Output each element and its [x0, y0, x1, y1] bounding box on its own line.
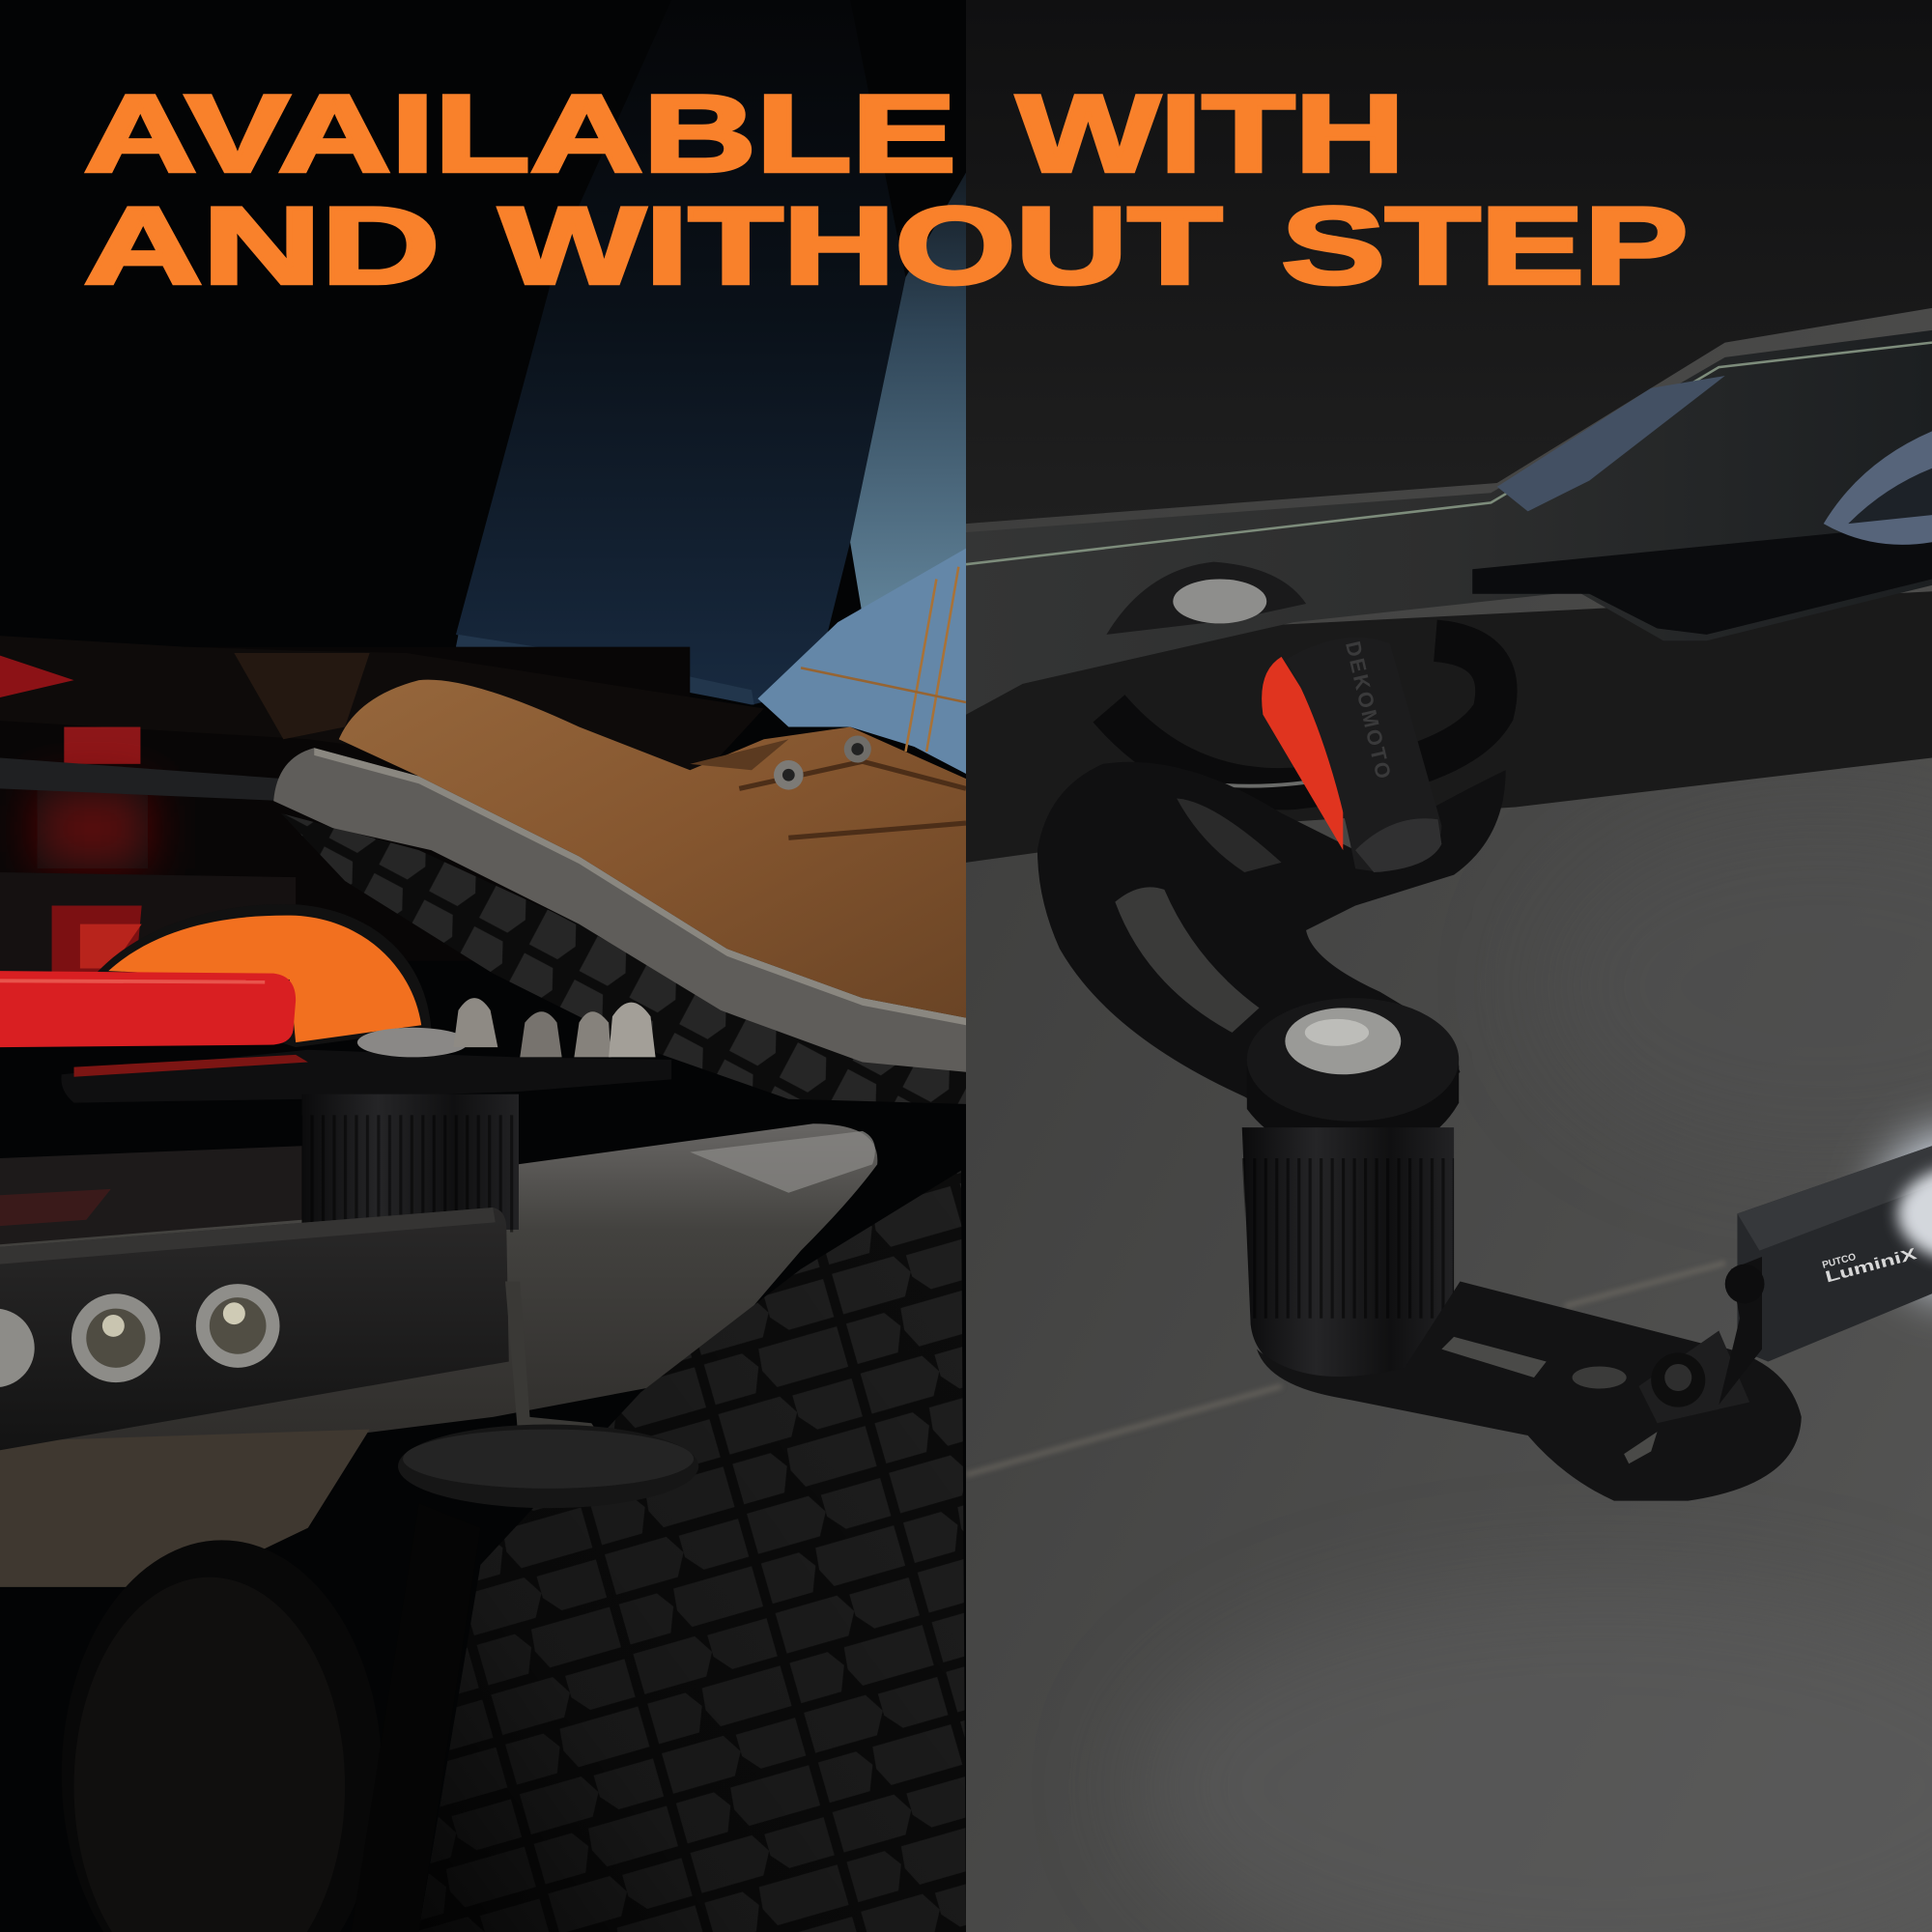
- glowing light: [1879, 1133, 1932, 1293]
- step plate with studs: [61, 998, 671, 1103]
- tire: [425, 1171, 966, 1932]
- boot leather upper: [339, 680, 966, 1018]
- ribbed cylinder: [301, 1094, 519, 1233]
- brand text: LuminiX: [1823, 1244, 1918, 1287]
- silver bumper: [0, 1123, 877, 1587]
- title: [84, 72, 1688, 307]
- bracket upper arm: [1037, 762, 1506, 1155]
- dark truck rack with red reflections: [0, 636, 764, 985]
- panel: right photo, without step: [966, 0, 1932, 1932]
- title: STEP: [1282, 185, 1688, 307]
- boot sole and tread: [273, 748, 966, 1104]
- jeans, light denim and cuff: [757, 173, 966, 774]
- light bar with LEDs: [0, 1208, 509, 1450]
- ribbed cylinder: [1242, 1127, 1454, 1382]
- bracket lower arm: [1257, 1282, 1802, 1501]
- title: WITH: [1016, 72, 1405, 195]
- chrome bumper strip: [966, 330, 1932, 715]
- strap with red loop: [1262, 638, 1441, 872]
- concrete floor lighting: [966, 813, 1932, 1932]
- wheel shadow: [73, 1540, 345, 1932]
- red hook bar: [0, 971, 296, 1047]
- upper mount bolt: [1106, 562, 1306, 635]
- lower mount disc: [398, 1282, 698, 1508]
- brand text: PUTCO: [1821, 1252, 1858, 1271]
- title: WITHOUT: [499, 185, 1222, 307]
- panel: left photo, step in use: [0, 0, 966, 1932]
- brand text: [1821, 1236, 1918, 1287]
- title: AND: [84, 185, 440, 307]
- orange half disc: [96, 904, 431, 1047]
- LED light pod with branding: [1719, 1146, 1932, 1405]
- jeans, dark leg: [456, 95, 906, 705]
- strap with red loop: DEKOMOTO: [1341, 639, 1397, 783]
- black bumper upper: [966, 0, 1932, 524]
- title: AVAILABLE: [84, 72, 956, 195]
- shadow area under bumper: [966, 591, 1932, 863]
- shackle ring: [1109, 640, 1496, 789]
